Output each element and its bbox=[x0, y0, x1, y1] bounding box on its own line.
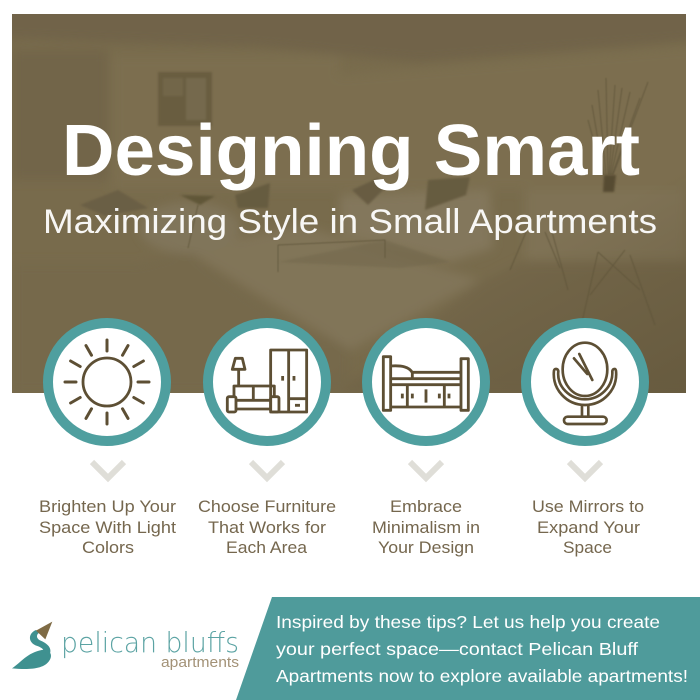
label: Use Mirrors to bbox=[532, 497, 644, 516]
label: Each Area bbox=[226, 538, 308, 557]
call to action banner bbox=[236, 597, 700, 700]
label: Brighten Up Your bbox=[39, 497, 176, 516]
icon: pelican bbox=[12, 622, 52, 669]
tip 4: mirrors bbox=[526, 323, 644, 557]
subtitle: Maximizing Style in Small Apartments bbox=[43, 203, 657, 241]
chevron bbox=[251, 462, 283, 478]
label: Expand Your bbox=[537, 518, 640, 537]
label: Colors bbox=[82, 538, 134, 557]
banner text: your perfect space—contact Pelican Bluff bbox=[276, 639, 638, 659]
banner text: Apartments now to explore available apartments! bbox=[276, 666, 688, 686]
label: Your Design bbox=[378, 538, 474, 557]
chevron bbox=[410, 462, 442, 478]
tip 3: minimalism bbox=[367, 323, 485, 557]
chevron bbox=[92, 462, 124, 478]
label: Space bbox=[563, 538, 612, 557]
chevron bbox=[569, 462, 601, 478]
icon: furniture bbox=[208, 323, 326, 441]
label: That Works for bbox=[208, 518, 326, 537]
tip 1: brighten bbox=[39, 323, 176, 557]
banner text: Inspired by these tips? Let us help you create bbox=[276, 612, 660, 632]
icon: bed bbox=[367, 323, 485, 441]
hero photo panel bbox=[0, 0, 700, 393]
label: Embrace bbox=[390, 497, 462, 516]
icon: sun bbox=[48, 323, 166, 441]
title: Designing Smart bbox=[62, 111, 640, 191]
label: Choose Furniture bbox=[198, 497, 336, 516]
icon: mirror bbox=[526, 323, 644, 441]
wordmark: pelican bluffs bbox=[61, 626, 239, 659]
wordmark sub-line: apartments bbox=[161, 655, 239, 671]
label: Space With Light bbox=[39, 518, 176, 537]
logo bbox=[12, 622, 239, 671]
label: Minimalism in bbox=[372, 518, 480, 537]
tip 2: furniture bbox=[198, 323, 336, 557]
